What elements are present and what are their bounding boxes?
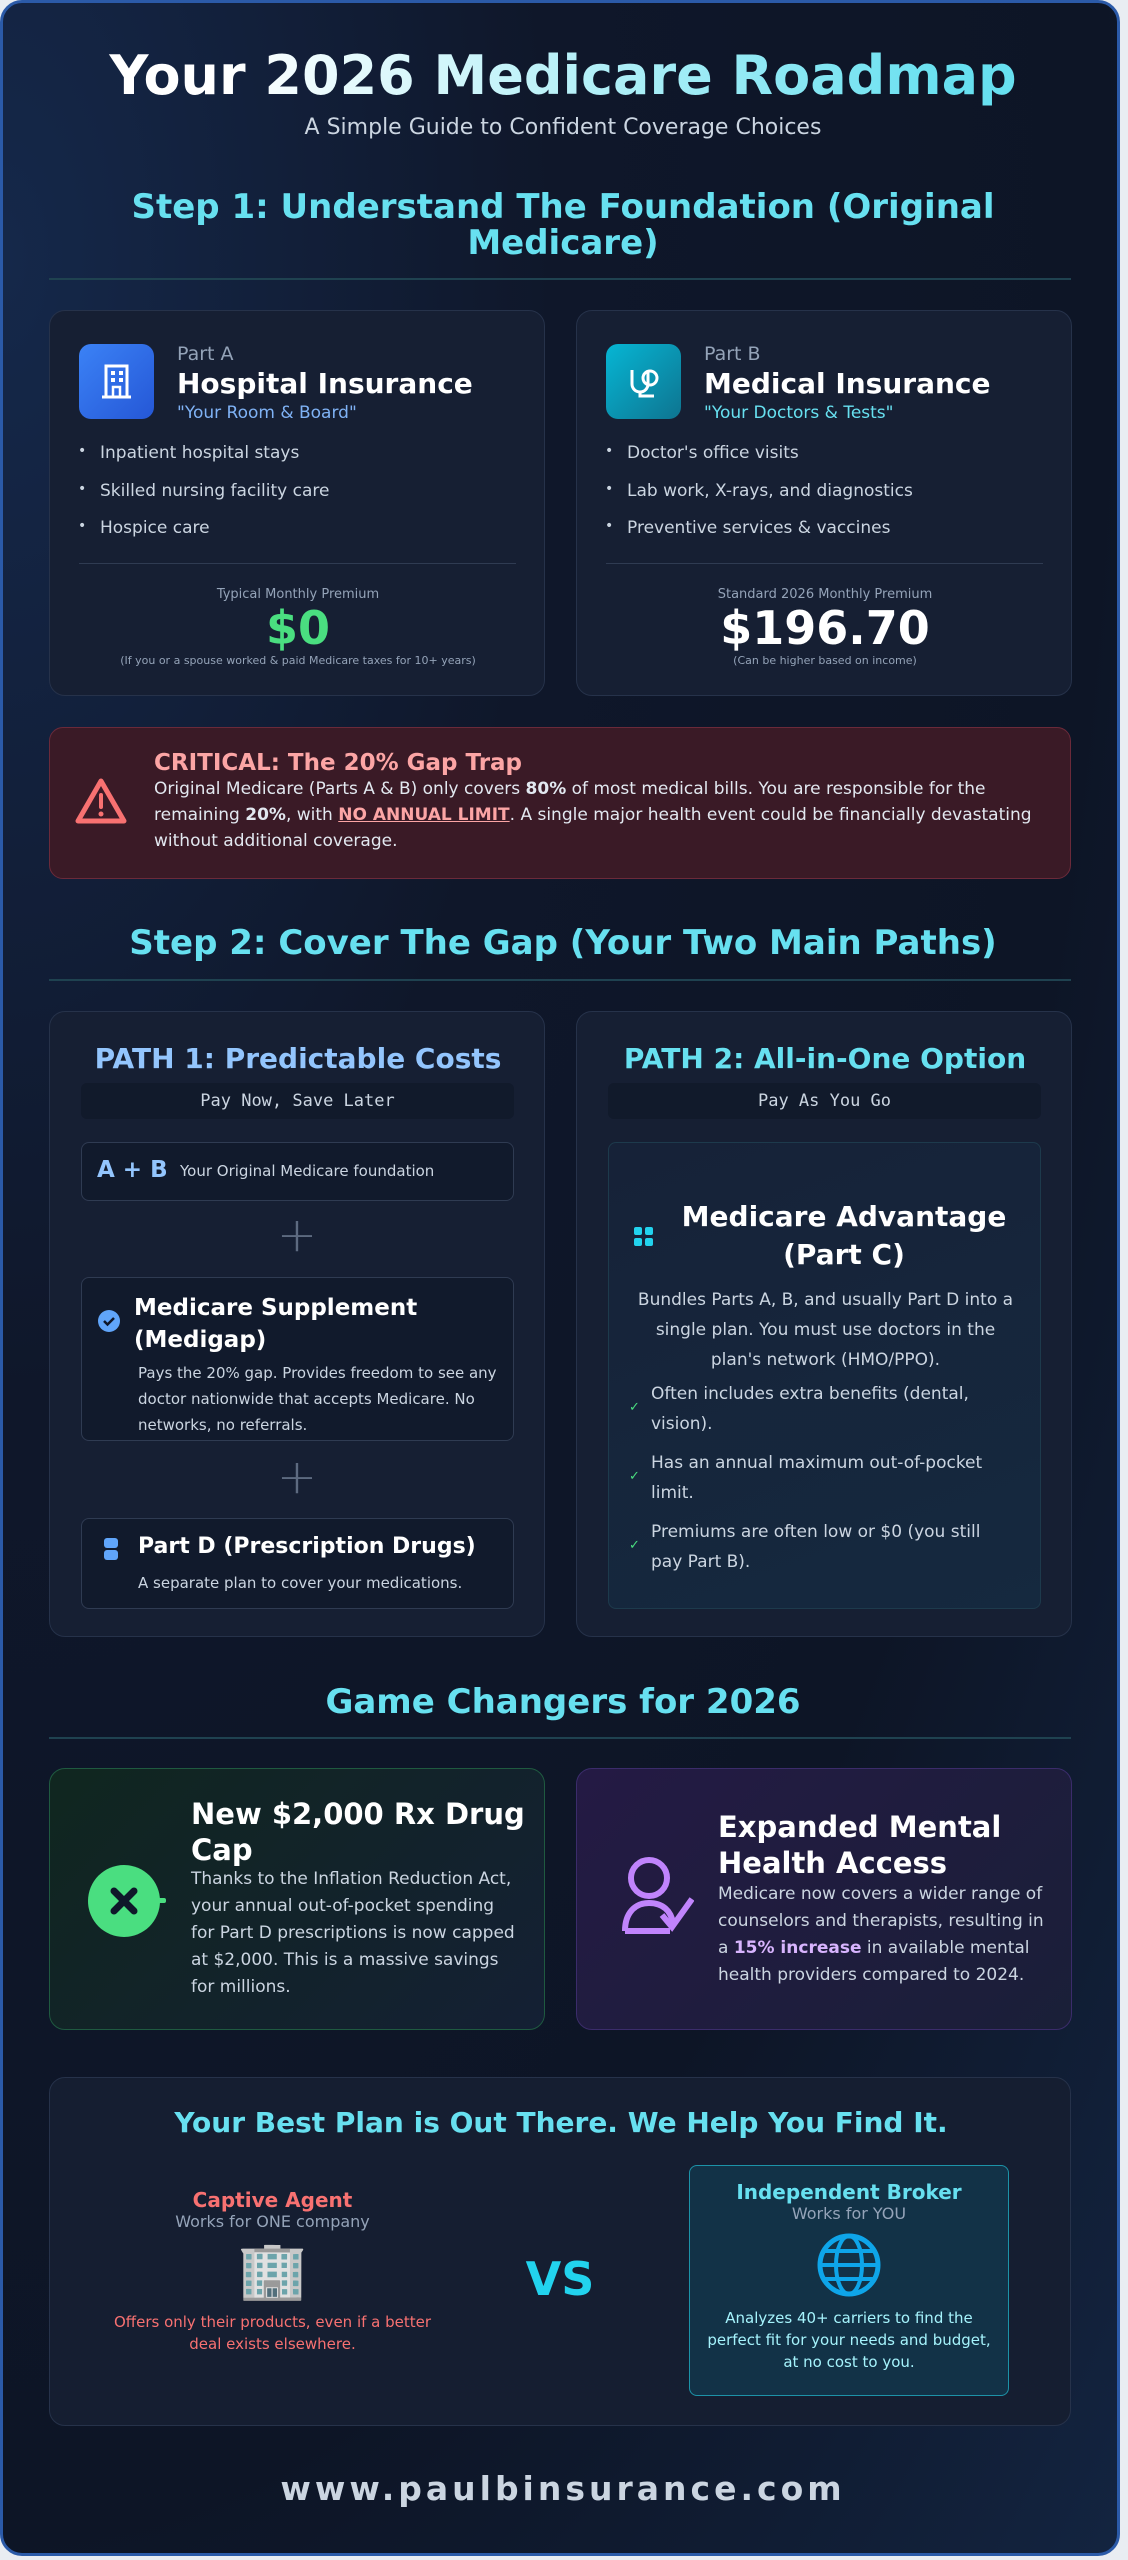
list: part A coverage: [80, 443, 329, 538]
box: A + B: Your Original Medicare foundation: [180, 1162, 434, 1180]
panel: path 1: +: [277, 1449, 317, 1505]
list: part A coverage: Inpatient hospital stays: [100, 443, 299, 463]
callout: 20% gap trap: [49, 727, 1071, 879]
captive agent: [114, 2188, 432, 2353]
box: medigap: [81, 1277, 514, 1441]
list: benefits: Premiums are often low or $0 (you still pay Part B).: [651, 1522, 980, 1572]
list: part B coverage: Doctor's office visits: [627, 443, 799, 463]
box: medicare advantage: Medicare Advantage: [682, 1200, 1006, 1233]
box: part D: A separate plan to cover your medications.: [138, 1574, 462, 1592]
text: part B heading: [704, 343, 991, 423]
box: A + B: A + B: [97, 1157, 168, 1183]
title: Your 2026 Medicare Roadmap: [109, 44, 1017, 107]
text: alert: CRITICAL: The 20% Gap Trap: [154, 750, 522, 776]
heading: step 1: Step 1: Understand The Foundation (Original: [131, 187, 994, 227]
list: part B coverage: Lab work, X-rays, and diagnostics: [627, 480, 913, 500]
list: benefits: ✓: [629, 1538, 640, 1553]
panel: part A: [49, 310, 545, 696]
independent broker: [689, 2165, 1009, 2396]
box: part D: [81, 1518, 514, 1609]
panel: path 2: PATH 2: All-in-One Option: [624, 1042, 1026, 1075]
icon: pill cap: [88, 1865, 166, 1937]
premium: part A: [120, 587, 476, 667]
icon: pill: [104, 1538, 118, 1560]
premium: part A: (If you or a spouse worked & paid Medicare taxes for 10+ years): [120, 654, 476, 667]
icon: doctor: [606, 344, 681, 419]
text: part B heading: Part B: [704, 343, 761, 365]
heading: step 2: Step 2: Cover The Gap (Your Two Main Paths): [129, 923, 997, 963]
box: medigap: (Medigap): [134, 1327, 266, 1353]
panel: part B: [576, 310, 1072, 696]
independent broker: Works for YOU: [792, 2204, 906, 2223]
panel: rx drug cap: [49, 1768, 545, 2030]
list: benefits: Has an annual maximum out-of-pocket limit.: [651, 1453, 982, 1503]
premium: part B: [718, 587, 932, 667]
pill: Pay As You Go: [758, 1091, 891, 1111]
captive agent: Offers only their products, even if a better deal exists elsewhere.: [114, 2313, 431, 2353]
text: part A heading: Hospital Insurance: [177, 367, 473, 400]
heading: step 1: [131, 187, 994, 263]
captive agent: Captive Agent: [193, 2188, 352, 2212]
heading: step 1: Medicare): [467, 223, 659, 263]
footer url: www.paulbinsurance.com: [280, 2469, 846, 2508]
captive agent: 🏢: [238, 2238, 307, 2303]
heading: game changers: Game Changers for 2026: [325, 1682, 801, 1722]
independent broker: Analyzes 40+ carriers to find the perfect fit for your needs and budget, at no cost to you.: [707, 2309, 991, 2371]
text: VS: VS: [526, 2252, 594, 2306]
premium: part A: Typical Monthly Premium: [217, 587, 379, 602]
icon: warning: [76, 778, 126, 824]
premium: part B: Standard 2026 Monthly Premium: [718, 587, 932, 602]
box: medigap: Medicare Supplement: [134, 1295, 417, 1321]
icon: check: [98, 1310, 120, 1332]
panel: mental health: Medicare now covers a wider range of counselors and therapists, resulting in a 15% increase in available mental health providers compared to 2024.: [718, 1884, 1044, 1985]
box: A + B: [81, 1142, 514, 1201]
panel: rx drug cap: New $2,000 Rx Drug Cap: [191, 1797, 525, 1867]
icon: grid: [634, 1227, 653, 1246]
text: alert: Original Medicare (Parts A & B) only covers 80% of most medical bills. You are responsible for the remaining 20%, with NO ANNUAL LIMIT. A single major health event could be financially devastating without additional coverage.: [154, 779, 1032, 851]
panel: path 2: [576, 1011, 1072, 1637]
captive agent: Works for ONE company: [175, 2212, 370, 2231]
panel: rx drug cap: Thanks to the Inflation Reduction Act, your annual out-of-pocket spending for Part D prescriptions is now capped at $2,000. This is a massive savings for millions.: [191, 1869, 515, 1997]
text: part A heading: Part A: [177, 343, 234, 365]
independent broker: Independent Broker: [736, 2180, 962, 2204]
list: part A coverage: Hospice care: [100, 518, 210, 538]
box: medigap: Pays the 20% gap. Provides freedom to see any doctor nationwide that accepts Medicare. No networks, no referrals.: [138, 1364, 497, 1434]
panel: mental health: [576, 1768, 1072, 2030]
premium: part B: $196.70: [720, 601, 930, 655]
box: medicare advantage: (Part C): [783, 1238, 905, 1271]
box: medicare advantage: Bundles Parts A, B, and usually Part D into a single plan. You must use doctors in the plan's network (HMO/PPO).: [638, 1290, 1013, 1370]
panel: agent vs broker: Your Best Plan is Out There. We Help You Find It.: [174, 2106, 948, 2139]
subtitle: A Simple Guide to Confident Coverage Choices: [305, 115, 821, 140]
panel: mental health: Expanded Mental Health Access: [718, 1810, 1001, 1880]
pill: [81, 1083, 514, 1119]
icon: hospital: [79, 344, 154, 419]
list: benefits: ✓: [629, 1400, 640, 1415]
panel: agent vs broker: [49, 2077, 1071, 2426]
premium: part B: (Can be higher based on income): [733, 654, 917, 667]
list: benefits: ✓: [629, 1469, 640, 1484]
panel: path 1: PATH 1: Predictable Costs: [95, 1042, 501, 1075]
premium: part A: $0: [266, 601, 330, 655]
icon: globe: [818, 2234, 880, 2296]
list: benefits: [629, 1384, 982, 1572]
list: part B coverage: [607, 443, 913, 538]
text: part A heading: "Your Room & Board": [177, 403, 357, 423]
text: part B heading: "Your Doctors & Tests": [704, 403, 893, 423]
list: benefits: Often includes extra benefits (dental, vision).: [651, 1384, 969, 1434]
icon: person check: [622, 1857, 694, 1934]
panel: path 1: +: [277, 1207, 317, 1263]
box: medicare advantage: [608, 1142, 1041, 1609]
list: part B coverage: Preventive services & vaccines: [627, 518, 890, 538]
text: part B heading: Medical Insurance: [704, 367, 991, 400]
list: part A coverage: Skilled nursing facility care: [100, 480, 329, 500]
panel: path 1: [49, 1011, 545, 1637]
box: part D: Part D (Prescription Drugs): [138, 1534, 476, 1559]
text: part A heading: [177, 343, 473, 423]
pill: [608, 1083, 1041, 1119]
pill: Pay Now, Save Later: [200, 1091, 395, 1111]
